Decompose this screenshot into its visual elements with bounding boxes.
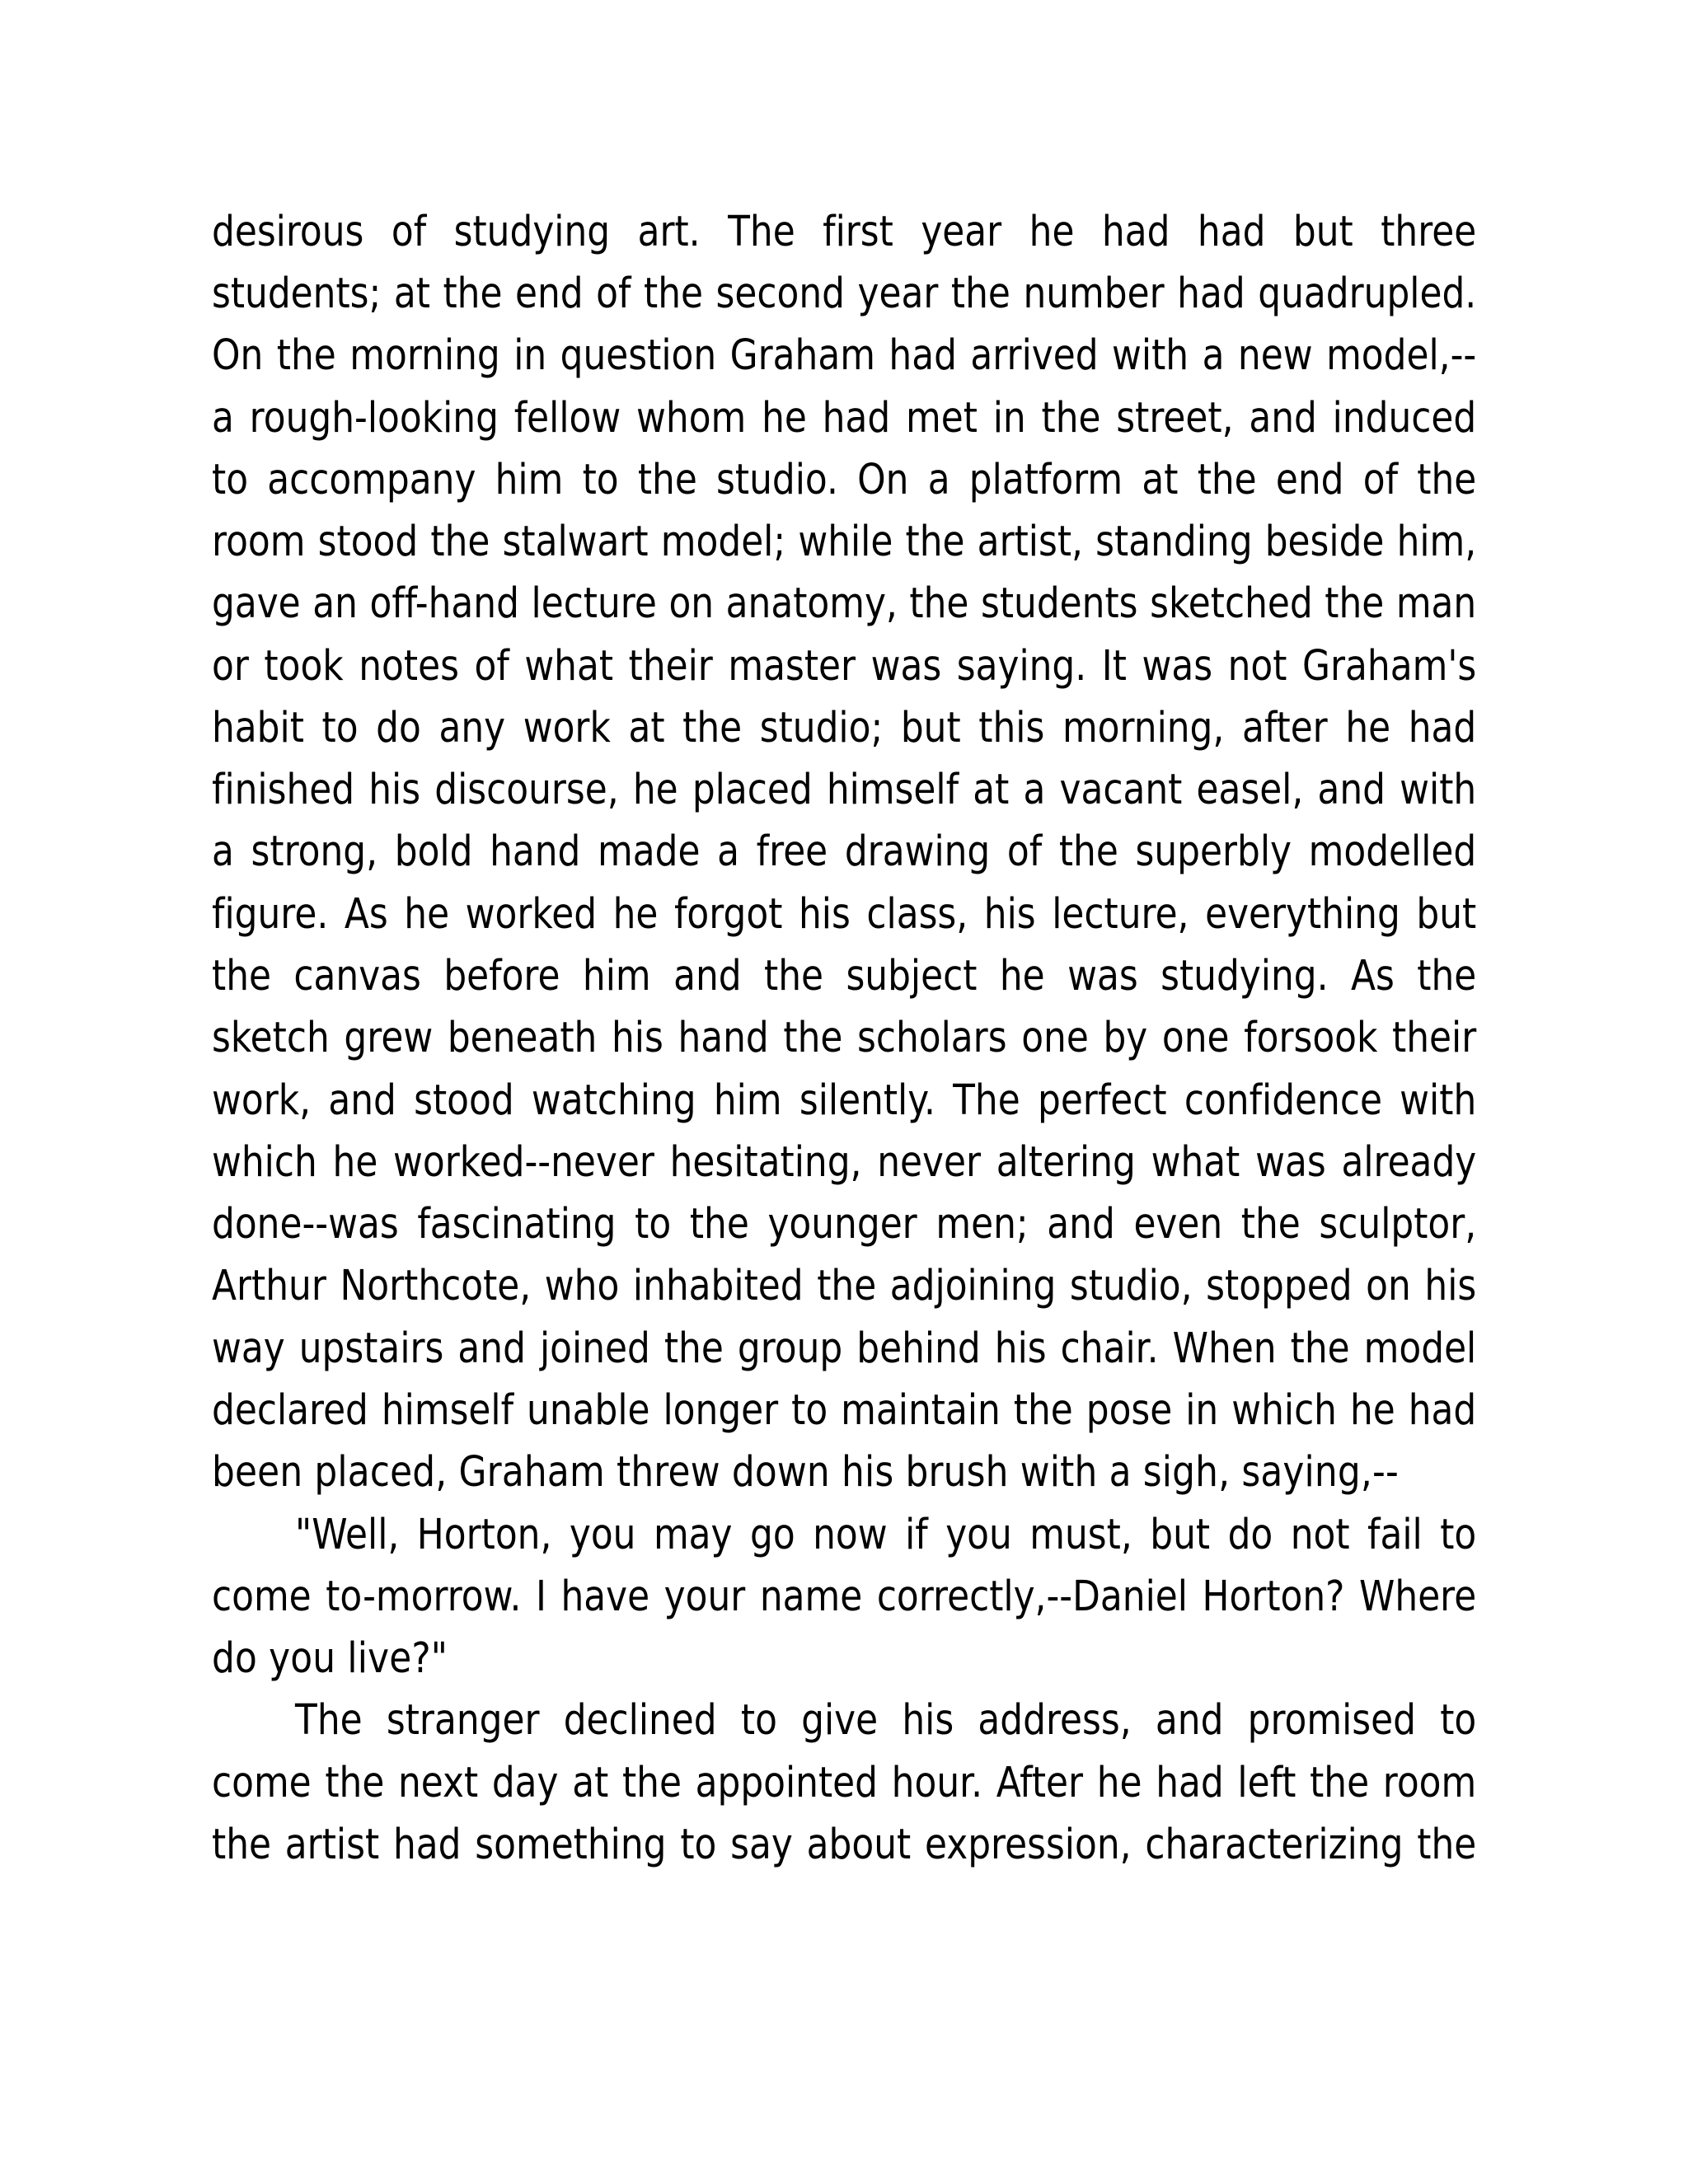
text block: Graham's speech: come to-morrow. I have your name correctly,--Daniel Horton? Where bbox=[212, 1572, 1476, 1621]
text block: closing paragraph: come the next day at the appointed hour. After he had left the room bbox=[212, 1759, 1476, 1807]
text block: opening paragraph: work, and stood watching him silently. The perfect confidence with bbox=[212, 1076, 1476, 1125]
text block: opening paragraph: desirous of studying art. The first year he had had but three bbox=[212, 208, 1476, 256]
text block: opening paragraph: declared himself unable longer to maintain the pose in which he had bbox=[212, 1386, 1476, 1435]
text block: opening paragraph: or took notes of what their master was saying. It was not Graham's bbox=[212, 642, 1476, 691]
text block: opening paragraph: room stood the stalwart model; while the artist, standing beside him, bbox=[212, 518, 1476, 566]
text block: opening paragraph: been placed, Graham threw down his brush with a sigh, saying,-- bbox=[212, 1448, 1399, 1497]
text block: Graham's speech: "Well, Horton, you may go now if you must, but do not fail to bbox=[295, 1510, 1476, 1559]
text block: opening paragraph: On the morning in question Graham had arrived with a new model,-- bbox=[212, 331, 1476, 380]
text block: closing paragraph: the artist had something to say about expression, characterizing the bbox=[212, 1821, 1476, 1869]
text block: Graham's speech bbox=[212, 1510, 1476, 1683]
text block: opening paragraph: Arthur Northcote, who inhabited the adjoining studio, stopped on his bbox=[212, 1262, 1476, 1310]
text block: opening paragraph: gave an off-hand lecture on anatomy, the students sketched the man bbox=[212, 579, 1476, 628]
text block: opening paragraph: way upstairs and joined the group behind his chair. When the model bbox=[212, 1324, 1476, 1373]
text block: opening paragraph bbox=[212, 208, 1477, 1497]
text block: opening paragraph: which he worked--never hesitating, never altering what was already bbox=[212, 1138, 1476, 1187]
text block: opening paragraph: sketch grew beneath his hand the scholars one by one forsook their bbox=[212, 1014, 1476, 1062]
text block: opening paragraph: a rough-looking fellow whom he had met in the street, and induced bbox=[212, 394, 1476, 443]
text block: closing paragraph: The stranger declined to give his address, and promised to bbox=[295, 1696, 1476, 1745]
text block: Graham's speech: do you live?" bbox=[212, 1634, 448, 1683]
text block: opening paragraph: the canvas before him and the subject he was studying. As the bbox=[212, 952, 1476, 1001]
text block: opening paragraph: done--was fascinating to the younger men; and even the sculptor, bbox=[212, 1200, 1476, 1249]
text block: opening paragraph: a strong, bold hand made a free drawing of the superbly modelled bbox=[212, 827, 1476, 876]
text block: opening paragraph: to accompany him to the studio. On a platform at the end of the bbox=[212, 456, 1476, 504]
text block: opening paragraph: figure. As he worked he forgot his class, his lecture, everything but bbox=[212, 890, 1476, 939]
text block: opening paragraph: students; at the end of the second year the number had quadrupled. bbox=[212, 269, 1476, 318]
text block: opening paragraph: finished his discourse, he placed himself at a vacant easel, and with bbox=[212, 766, 1476, 814]
text block: closing paragraph bbox=[212, 1696, 1476, 1869]
text block: opening paragraph: habit to do any work at the studio; but this morning, after he had bbox=[212, 704, 1476, 752]
